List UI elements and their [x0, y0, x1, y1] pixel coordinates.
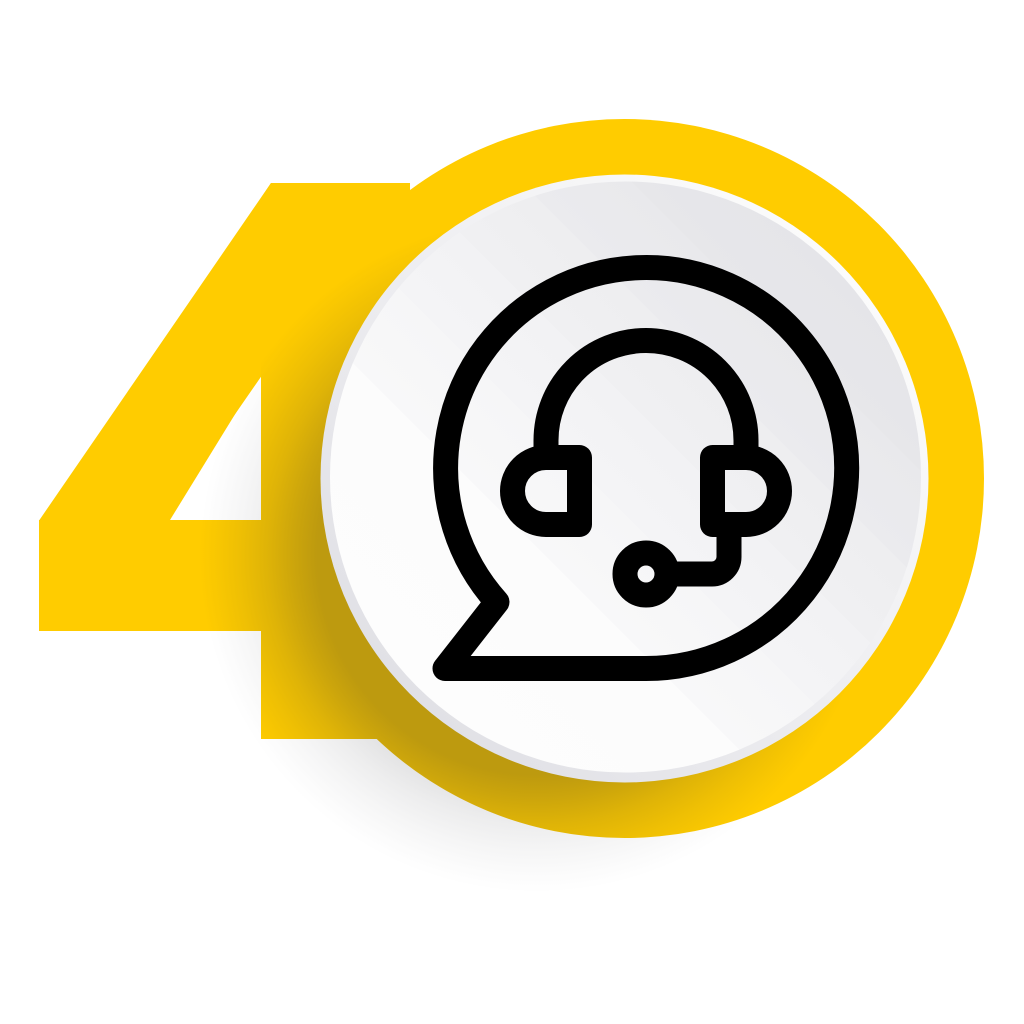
shadow on yellow shapes	[220, 266, 806, 838]
shadow on background	[199, 217, 875, 893]
yellow circle	[265, 119, 984, 838]
numeral 4	[39, 183, 410, 739]
white disc	[320, 174, 928, 782]
headband	[546, 340, 746, 450]
microphone head	[625, 553, 667, 595]
badge graphic	[39, 119, 984, 858]
numeral 4: 4	[30, 27, 488, 891]
speech bubble outline	[445, 268, 847, 669]
left ear cup	[512, 458, 580, 524]
disc face	[330, 182, 921, 772]
microphone wire	[670, 530, 729, 574]
disc rim	[320, 174, 928, 782]
icon: headset in speech bubble	[445, 268, 847, 669]
right ear cup	[712, 458, 779, 524]
